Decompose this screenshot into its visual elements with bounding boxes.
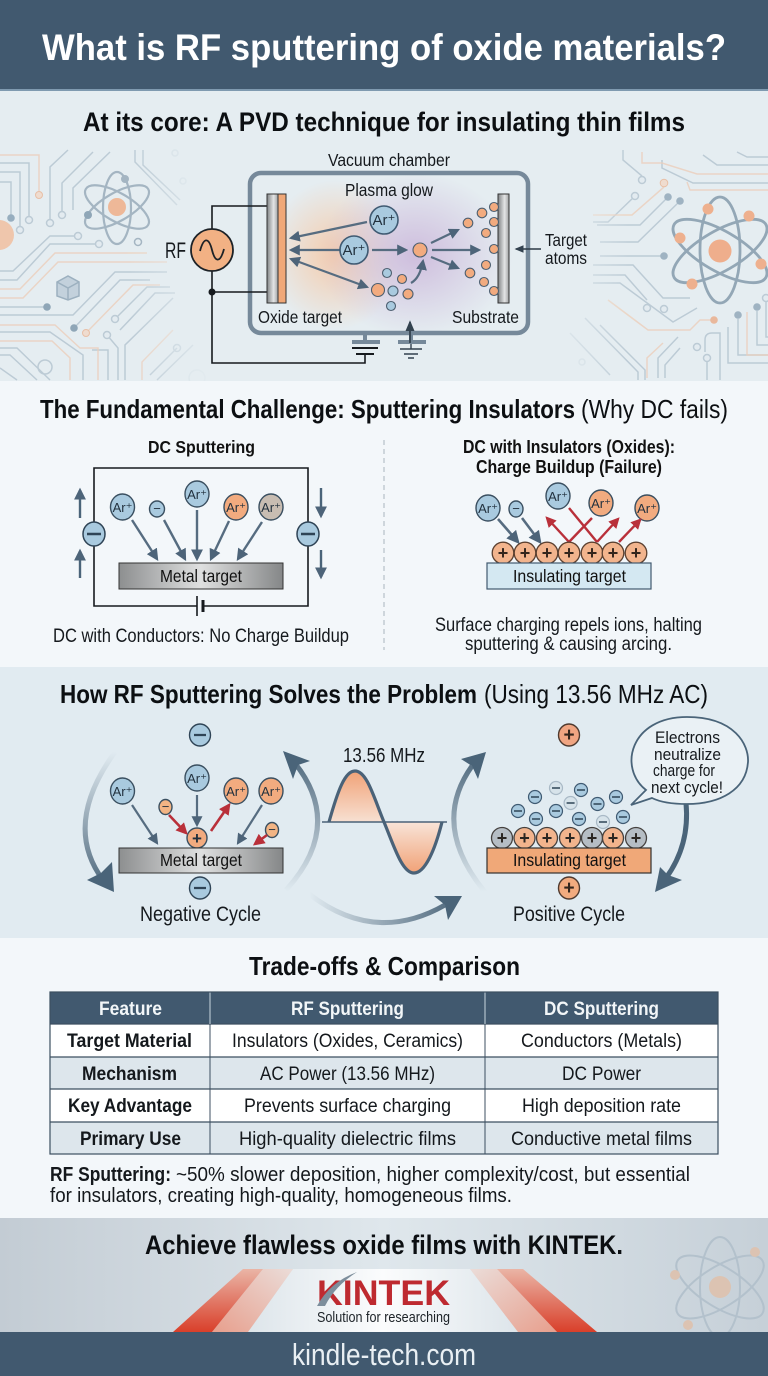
table rows: Conductors (Metals) bbox=[521, 1031, 682, 1052]
panel: call to action bbox=[0, 1218, 768, 1337]
surface charges: + bbox=[565, 828, 575, 848]
surface charges: + bbox=[542, 543, 552, 563]
table header bbox=[99, 999, 659, 1020]
panel: trade-offs and comparison bbox=[0, 938, 768, 1218]
ion motion arrows bbox=[291, 222, 541, 287]
ions and electrons bbox=[110, 481, 283, 520]
surface charges bbox=[492, 828, 646, 848]
ions bbox=[476, 483, 659, 521]
negative cycle diagram: Negative Cycle bbox=[140, 903, 261, 926]
metal target bbox=[119, 563, 283, 589]
table rows: Primary Use bbox=[80, 1129, 181, 1150]
sputtered particles bbox=[372, 202, 498, 310]
plasma glow bbox=[267, 173, 513, 337]
insulating target: Insulating target bbox=[513, 566, 626, 586]
subpanel: charge buildup: sputtering & causing arcing. bbox=[465, 634, 672, 655]
subpanel: charge buildup bbox=[435, 437, 702, 655]
callout: Electrons bbox=[655, 728, 720, 747]
cycle arrows bbox=[85, 751, 687, 923]
icon: atom right bbox=[664, 197, 768, 303]
impact arrows bbox=[132, 510, 262, 559]
table header: RF Sputtering bbox=[291, 999, 404, 1020]
table rows: High deposition rate bbox=[522, 1096, 681, 1117]
subpanel: DC sputtering: DC with Conductors: No Charge Buildup bbox=[53, 626, 349, 647]
page title: What is RF sputtering of oxide materials? bbox=[42, 27, 726, 68]
blue incoming arrows bbox=[498, 518, 540, 542]
table rows: Target Material bbox=[67, 1031, 192, 1052]
surface charges: + bbox=[542, 828, 552, 848]
argon ions: Ar⁺ bbox=[343, 242, 365, 259]
circuit board background right bbox=[570, 150, 768, 380]
table header: DC Sputtering bbox=[544, 999, 659, 1020]
ions: Ar⁺ bbox=[113, 784, 132, 799]
ions: Ar⁺ bbox=[478, 501, 498, 516]
surface charges: + bbox=[520, 543, 530, 563]
callout: neutralize bbox=[654, 745, 721, 764]
surface charges: + bbox=[519, 828, 530, 848]
table rows: Mechanism bbox=[82, 1064, 177, 1085]
section heading: (Using 13.56 MHz AC) bbox=[484, 679, 708, 709]
ions bbox=[110, 765, 283, 848]
table rows: Conductive metal films bbox=[511, 1129, 692, 1150]
icon: atom left bbox=[79, 172, 155, 246]
website: kindle-tech.com bbox=[292, 1337, 476, 1372]
callout bbox=[631, 717, 748, 805]
section heading: (Why DC fails) bbox=[581, 394, 728, 424]
oxide target plate bbox=[267, 194, 286, 303]
circuit wiring and RF source: RF bbox=[165, 238, 186, 263]
trade-off summary: RF Sputtering: bbox=[50, 1164, 171, 1186]
chamber labels: Vacuum chamber bbox=[328, 150, 450, 170]
callout: next cycle! bbox=[651, 778, 723, 797]
icon: atom decoration bbox=[667, 1237, 768, 1337]
section heading: Trade-offs & Comparison bbox=[249, 951, 520, 981]
subpanel: DC sputtering: DC Sputtering bbox=[148, 437, 255, 457]
polarity markers: + bbox=[563, 725, 575, 746]
surface charges: + bbox=[631, 828, 641, 848]
polarity markers bbox=[190, 724, 210, 899]
insulating target bbox=[487, 563, 651, 589]
callout: charge for bbox=[653, 761, 715, 780]
table header: Feature bbox=[99, 999, 162, 1020]
surface charges: + bbox=[608, 828, 618, 848]
ground symbols bbox=[352, 322, 426, 358]
metal target bbox=[119, 848, 283, 873]
chamber labels: atoms bbox=[545, 248, 587, 268]
trade-off summary: for insulators, creating high-quality, homogeneous films. bbox=[50, 1185, 512, 1207]
surface charges bbox=[492, 542, 647, 564]
ions and electrons: Ar⁺ bbox=[261, 500, 281, 515]
ions: Ar⁺ bbox=[187, 771, 207, 786]
section heading: How RF Sputtering Solves the Problem bbox=[60, 679, 477, 709]
surface charges: + bbox=[498, 543, 508, 563]
chamber labels: Plasma glow bbox=[345, 180, 433, 200]
surface charges: + bbox=[497, 828, 507, 848]
surface charges: + bbox=[564, 543, 574, 563]
surface charges: + bbox=[587, 543, 597, 563]
arrows bbox=[132, 795, 267, 844]
negative cycle diagram bbox=[110, 724, 283, 926]
ions: + bbox=[192, 829, 202, 848]
metal target: Metal target bbox=[160, 850, 242, 870]
sine wave 13.56 MHz bbox=[322, 744, 447, 873]
subpanel: charge buildup: DC with Insulators (Oxides): bbox=[463, 437, 675, 457]
circuit board background left bbox=[0, 150, 205, 386]
argon ions: Ar⁺ bbox=[373, 212, 395, 229]
surface charges: + bbox=[608, 543, 618, 563]
ions and electrons: Ar⁺ bbox=[113, 500, 132, 515]
circuit wiring and RF source bbox=[165, 206, 365, 363]
header banner bbox=[0, 0, 768, 91]
sine wave 13.56 MHz: 13.56 MHz bbox=[343, 744, 425, 767]
logo ribbon bbox=[173, 1269, 597, 1332]
ions and electrons: − bbox=[153, 501, 161, 516]
vacuum chamber bbox=[250, 173, 528, 333]
ions: Ar⁺ bbox=[637, 501, 657, 516]
trade-off summary bbox=[50, 1164, 690, 1207]
divider bbox=[383, 440, 385, 650]
ions: − bbox=[512, 501, 520, 516]
ions and electrons: Ar⁺ bbox=[187, 487, 207, 502]
polarity markers: + bbox=[563, 878, 575, 899]
section heading: At its core: A PVD technique for insulating thin films bbox=[83, 107, 685, 137]
KINTEK logo: Solution for researching bbox=[317, 1309, 450, 1326]
table rows: AC Power (13.56 MHz) bbox=[260, 1064, 435, 1085]
fade left bbox=[130, 140, 220, 381]
chamber labels: Target bbox=[545, 230, 587, 250]
KINTEK logo: KINTEK bbox=[317, 1274, 450, 1313]
ions: Ar⁺ bbox=[591, 496, 611, 511]
table rows: Insulators (Oxides, Ceramics) bbox=[232, 1031, 463, 1052]
metal target: Metal target bbox=[160, 566, 242, 586]
polarity markers bbox=[558, 724, 580, 899]
DC circuit bbox=[80, 468, 321, 616]
ions: − bbox=[162, 799, 169, 814]
insulating target orange: Insulating target bbox=[513, 850, 626, 870]
surface charges: + bbox=[631, 543, 641, 563]
table rows: Key Advantage bbox=[68, 1096, 192, 1117]
panel: core PVD technique bbox=[0, 91, 768, 386]
icon: cube bbox=[57, 276, 79, 300]
comparison table bbox=[50, 992, 718, 1154]
argon ions bbox=[340, 206, 398, 264]
chamber labels: Oxide target bbox=[258, 307, 342, 327]
panel: RF solution bbox=[0, 667, 768, 938]
subpanel: DC sputtering bbox=[53, 437, 349, 647]
table rows: DC Power bbox=[562, 1064, 642, 1085]
red repelled arrows bbox=[547, 508, 640, 542]
decorative nodes bbox=[0, 179, 761, 336]
call to action heading: Achieve flawless oxide films with KINTEK. bbox=[145, 1230, 623, 1260]
ions: Ar⁺ bbox=[226, 784, 246, 799]
ions: − bbox=[268, 822, 276, 837]
chamber labels: Substrate bbox=[452, 307, 519, 327]
fade right bbox=[548, 140, 628, 381]
chamber labels bbox=[258, 150, 587, 327]
subpanel: charge buildup: Surface charging repels ions, halting bbox=[435, 615, 702, 636]
ions and electrons: Ar⁺ bbox=[226, 500, 246, 515]
table rows: Prevents surface charging bbox=[244, 1096, 451, 1117]
section heading: The Fundamental Challenge: Sputtering Insulators bbox=[40, 394, 575, 424]
surface charges: + bbox=[587, 828, 597, 848]
electrons bbox=[512, 782, 630, 828]
panel: fundamental challenge bbox=[0, 381, 768, 667]
footer bar bbox=[0, 1332, 768, 1376]
ions: Ar⁺ bbox=[548, 489, 568, 504]
table rows: High-quality dielectric films bbox=[239, 1129, 456, 1150]
table rows bbox=[67, 1031, 692, 1150]
circuit traces orange right bbox=[593, 152, 768, 378]
insulating target orange bbox=[487, 848, 651, 873]
circuit traces orange left bbox=[0, 155, 173, 380]
substrate plate bbox=[498, 194, 509, 303]
ions: Ar⁺ bbox=[261, 784, 281, 799]
positive cycle diagram bbox=[487, 724, 651, 926]
trade-off summary: ~50% slower deposition, higher complexity/cost, but essential bbox=[176, 1164, 690, 1186]
subpanel: charge buildup: Charge Buildup (Failure) bbox=[476, 457, 662, 477]
positive cycle diagram: Positive Cycle bbox=[513, 903, 625, 926]
